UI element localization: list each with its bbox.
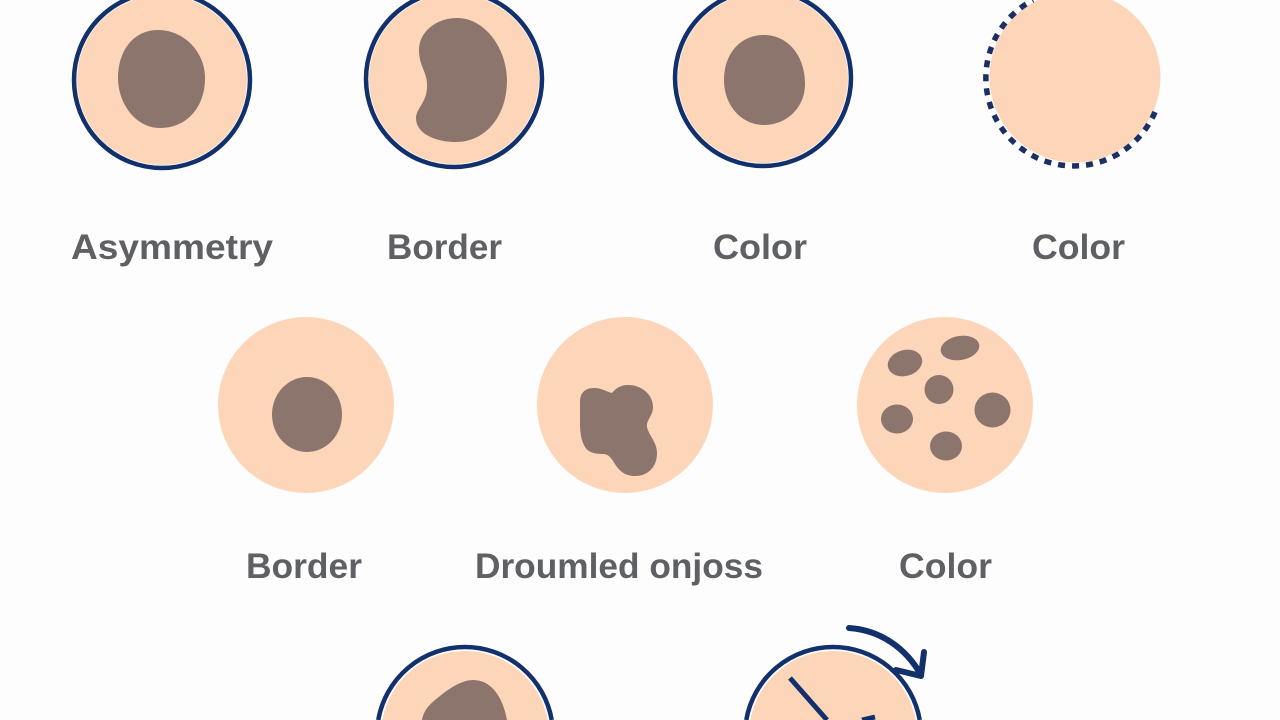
icon: irregular lesion [537, 317, 713, 493]
icon: border lesion [366, 0, 542, 167]
icon: asymmetry lesion [74, 0, 250, 168]
label: Color: Color [899, 547, 992, 586]
icon: dashed outline circle [986, 0, 1160, 166]
label: Color: Color [713, 228, 807, 267]
icon: evolving clock with arrow [746, 628, 924, 720]
icon: bottom lesion [378, 647, 552, 720]
arrow: clockwise [849, 628, 924, 676]
icon: color lesion [675, 0, 851, 166]
icon: multiple spots lesion [857, 317, 1033, 493]
clock hands [790, 678, 875, 720]
label: Border: Border [246, 547, 362, 586]
label: Border: Border [387, 228, 502, 267]
label: Color: Color [1032, 228, 1125, 267]
icon: round lesion [218, 317, 394, 493]
label: Droumled onjoss: Droumled onjoss [475, 547, 763, 586]
label: Asymmetry: Asymmetry [71, 228, 274, 267]
